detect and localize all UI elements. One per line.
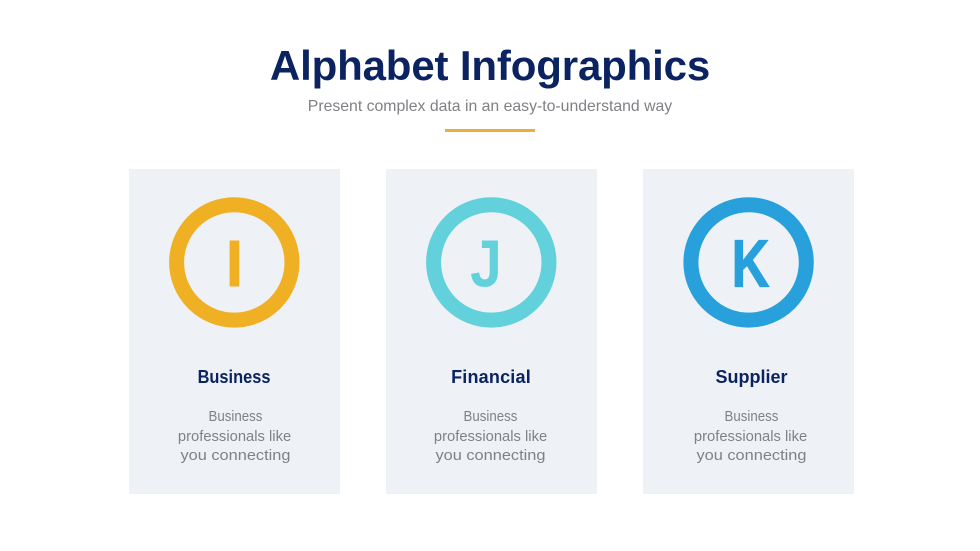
heading: supplier: Supplier: [715, 367, 788, 387]
panel: financial: [386, 169, 597, 494]
text: supplier: you connecting: [696, 447, 806, 464]
text: supplier: professionals like: [694, 428, 808, 444]
text: supplier: [694, 408, 808, 464]
icon: letter J circle: [426, 197, 556, 328]
title: Alphabet Infographics: [270, 42, 710, 89]
text: business: professionals like: [178, 428, 292, 444]
text: financial: professionals like: [434, 428, 547, 444]
text: financial: [434, 408, 547, 464]
panel: supplier: [643, 169, 854, 494]
text: financial: you connecting: [436, 447, 545, 464]
icon: letter I circle: [169, 197, 300, 328]
text: business: [178, 408, 292, 464]
panel: business: [129, 169, 340, 494]
title underline: [445, 129, 535, 132]
icon: letter J circle: J: [470, 227, 502, 302]
text: financial: Business: [464, 408, 517, 425]
text: business: you connecting: [180, 447, 290, 464]
icon: letter K circle: [683, 197, 814, 328]
icon: letter K circle: K: [732, 226, 769, 301]
text: supplier: Business: [724, 408, 778, 425]
icon: letter I circle: I: [225, 227, 244, 302]
subtitle: Present complex data in an easy-to-understand way: [308, 98, 672, 115]
text: business: Business: [208, 408, 262, 425]
heading: business: Business: [198, 367, 271, 387]
heading: financial: Financial: [451, 367, 531, 387]
